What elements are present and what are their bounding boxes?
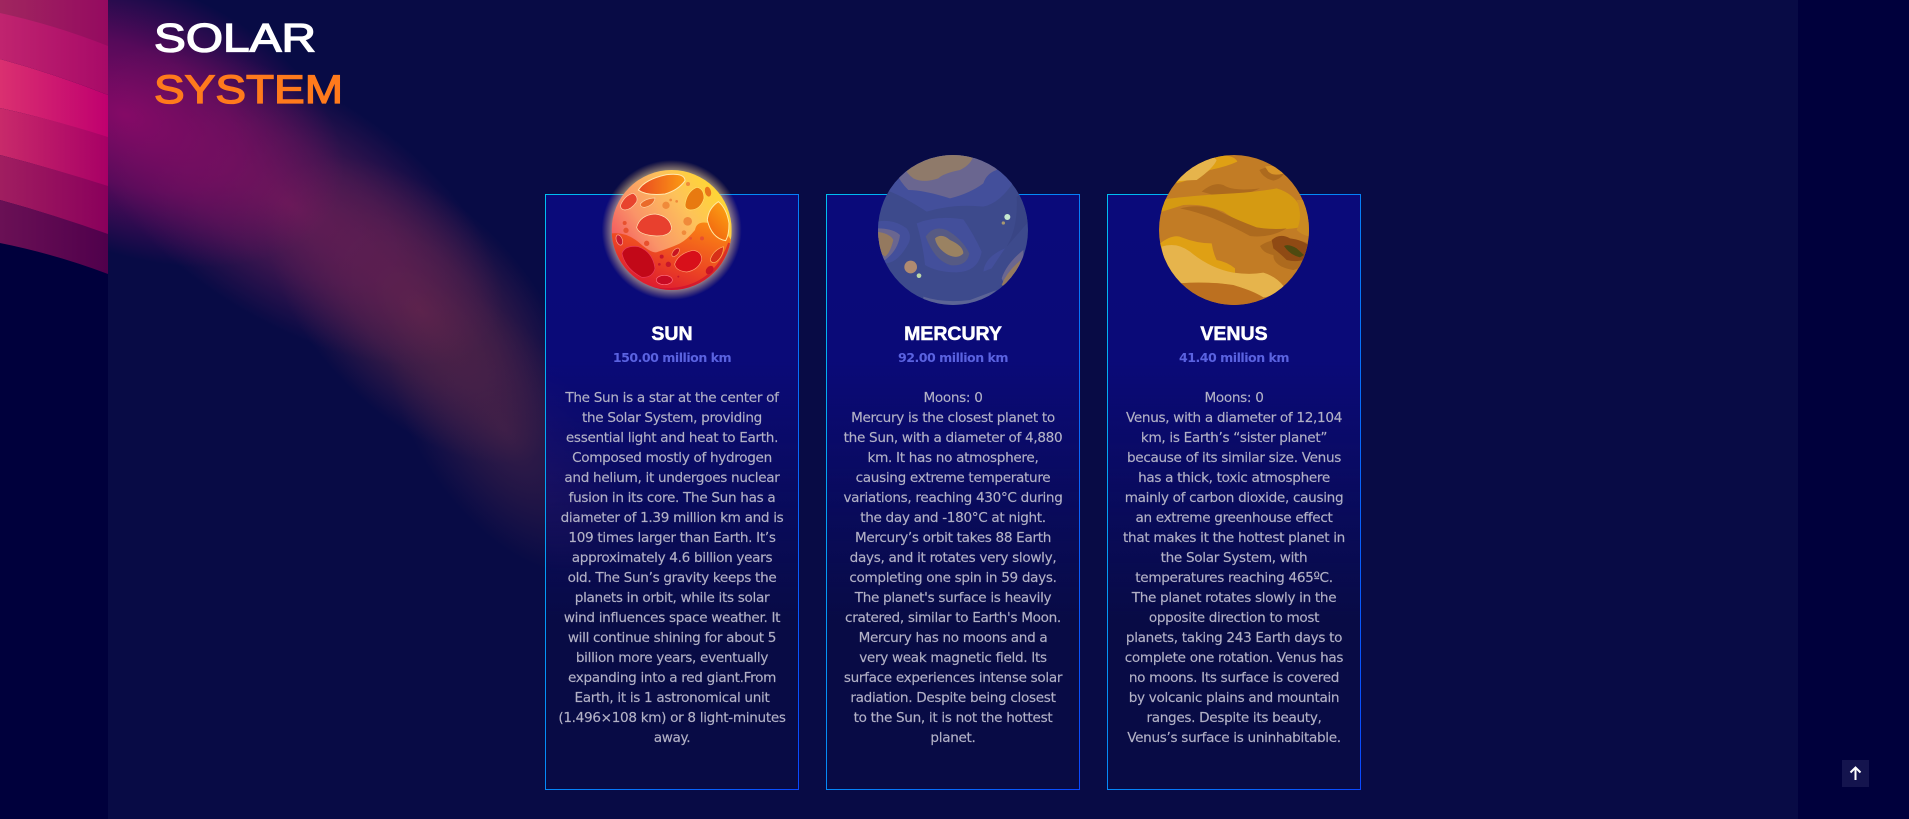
text block: mercury: variations, reaching 430°C during — [843, 490, 1063, 506]
text block: venus: Venus’s surface is uninhabitable. — [1127, 730, 1341, 746]
icon: mercury — [878, 155, 1028, 305]
text block: sun: fusion in its core. The Sun has a — [569, 490, 775, 506]
text block: mercury: completing one spin in 59 days. — [849, 570, 1057, 586]
text block: mercury: The planet's surface is heavily — [855, 590, 1051, 606]
text block: sun: will continue shining for about 5 — [568, 630, 776, 646]
text block: sun: away. — [654, 730, 690, 746]
text block: sun — [558, 390, 786, 746]
title: SYSTEM — [154, 68, 343, 112]
text block: sun: and helium, it undergoes nuclear — [564, 470, 780, 486]
text block: venus: complete one rotation. Venus has — [1125, 650, 1343, 666]
text block: venus: mainly of carbon dioxide, causing — [1125, 490, 1343, 506]
text block: mercury: Mercury is the closest planet to — [851, 410, 1055, 426]
text block: sun: approximately 4.6 billion years — [572, 550, 772, 566]
panel: sun card — [545, 194, 799, 790]
text block: venus — [1123, 390, 1345, 746]
distance: sun: 150.00 million km — [613, 350, 731, 365]
text block: sun: old. The Sun’s gravity keeps the — [568, 570, 776, 586]
text block: mercury: the day and -180°C at night. — [860, 510, 1046, 526]
text block: sun: (1.496×108 km) or 8 light-minutes — [558, 710, 786, 726]
scroll to top button with arrow — [1842, 760, 1869, 787]
text block: mercury: the Sun, with a diameter of 4,880 — [844, 430, 1062, 446]
text block: venus: Venus, with a diameter of 12,104 — [1126, 410, 1342, 426]
text block: venus: planets, taking 243 Earth days to — [1126, 630, 1342, 646]
panel: venus card — [1107, 194, 1361, 790]
title — [154, 16, 343, 112]
text block: mercury: radiation. Despite being closest — [850, 690, 1056, 706]
text block: sun: wind influences space weather. It — [564, 610, 780, 626]
text block: mercury: Mercury’s orbit takes 88 Earth — [855, 530, 1051, 546]
icon: venus — [1159, 155, 1309, 305]
text block: mercury: to the Sun, it is not the hottest — [854, 710, 1052, 726]
text block: venus: by volcanic plains and mountain — [1129, 690, 1339, 706]
icon: sun — [602, 160, 741, 300]
title: SOLAR — [154, 16, 316, 60]
panel: mercury card — [826, 194, 1080, 790]
text block: sun: Earth, it is 1 astronomical unit — [574, 690, 769, 706]
text block: sun: the Solar System, providing — [582, 410, 762, 426]
text block: mercury: km. It has no atmosphere, — [868, 450, 1038, 466]
text block: venus: an extreme greenhouse effect — [1135, 510, 1333, 526]
heading: venus: VENUS — [1200, 323, 1268, 345]
text block: venus: temperatures reaching 465ºC. — [1135, 570, 1333, 586]
text block: venus: because of its similar size. Venus — [1127, 450, 1341, 466]
text block: sun: Composed mostly of hydrogen — [572, 450, 772, 466]
text block: mercury: very weak magnetic field. Its — [859, 650, 1047, 666]
text block: sun: 109 times larger than Earth. It’s — [568, 530, 776, 546]
text block: mercury — [843, 390, 1063, 746]
text block: sun: planets in orbit, while its solar — [575, 590, 769, 606]
text block: venus: that makes it the hottest planet in — [1123, 530, 1345, 546]
text block: sun: The Sun is a star at the center of — [565, 390, 779, 406]
text block: venus: no moons. Its surface is covered — [1129, 670, 1339, 686]
text block: sun: expanding into a red giant.From — [568, 670, 776, 686]
text block: venus: the Solar System, with — [1161, 550, 1307, 566]
text block: mercury: cratered, similar to Earth's Moon. — [845, 610, 1061, 626]
text block: sun: diameter of 1.39 million km and is — [561, 510, 783, 526]
text block: venus: ranges. Despite its beauty, — [1146, 710, 1322, 726]
heading: sun: SUN — [651, 323, 693, 345]
text block: venus: The planet rotates slowly in the — [1132, 590, 1336, 606]
text block: mercury: causing extreme temperature — [856, 470, 1050, 486]
text block: mercury: Mercury has no moons and a — [859, 630, 1047, 646]
text block: sun: essential light and heat to Earth. — [566, 430, 778, 446]
distance: venus: 41.40 million km — [1179, 350, 1289, 365]
text block: mercury: planet. — [930, 730, 976, 746]
decorative wave bands at left — [0, 0, 108, 274]
text block: mercury: Moons: 0 — [923, 390, 983, 406]
text block: venus: opposite direction to most — [1149, 610, 1319, 626]
text block: mercury: surface experiences intense solar — [844, 670, 1062, 686]
text block: venus: Moons: 0 — [1204, 390, 1264, 406]
text block: venus: km, is Earth’s “sister planet” — [1141, 430, 1327, 446]
heading: mercury: MERCURY — [904, 323, 1002, 345]
text block: venus: has a thick, toxic atmosphere — [1138, 470, 1330, 486]
text block: sun: billion more years, eventually — [576, 650, 768, 666]
distance: mercury: 92.00 million km — [898, 350, 1008, 365]
text block: mercury: days, and it rotates very slowly, — [850, 550, 1056, 566]
